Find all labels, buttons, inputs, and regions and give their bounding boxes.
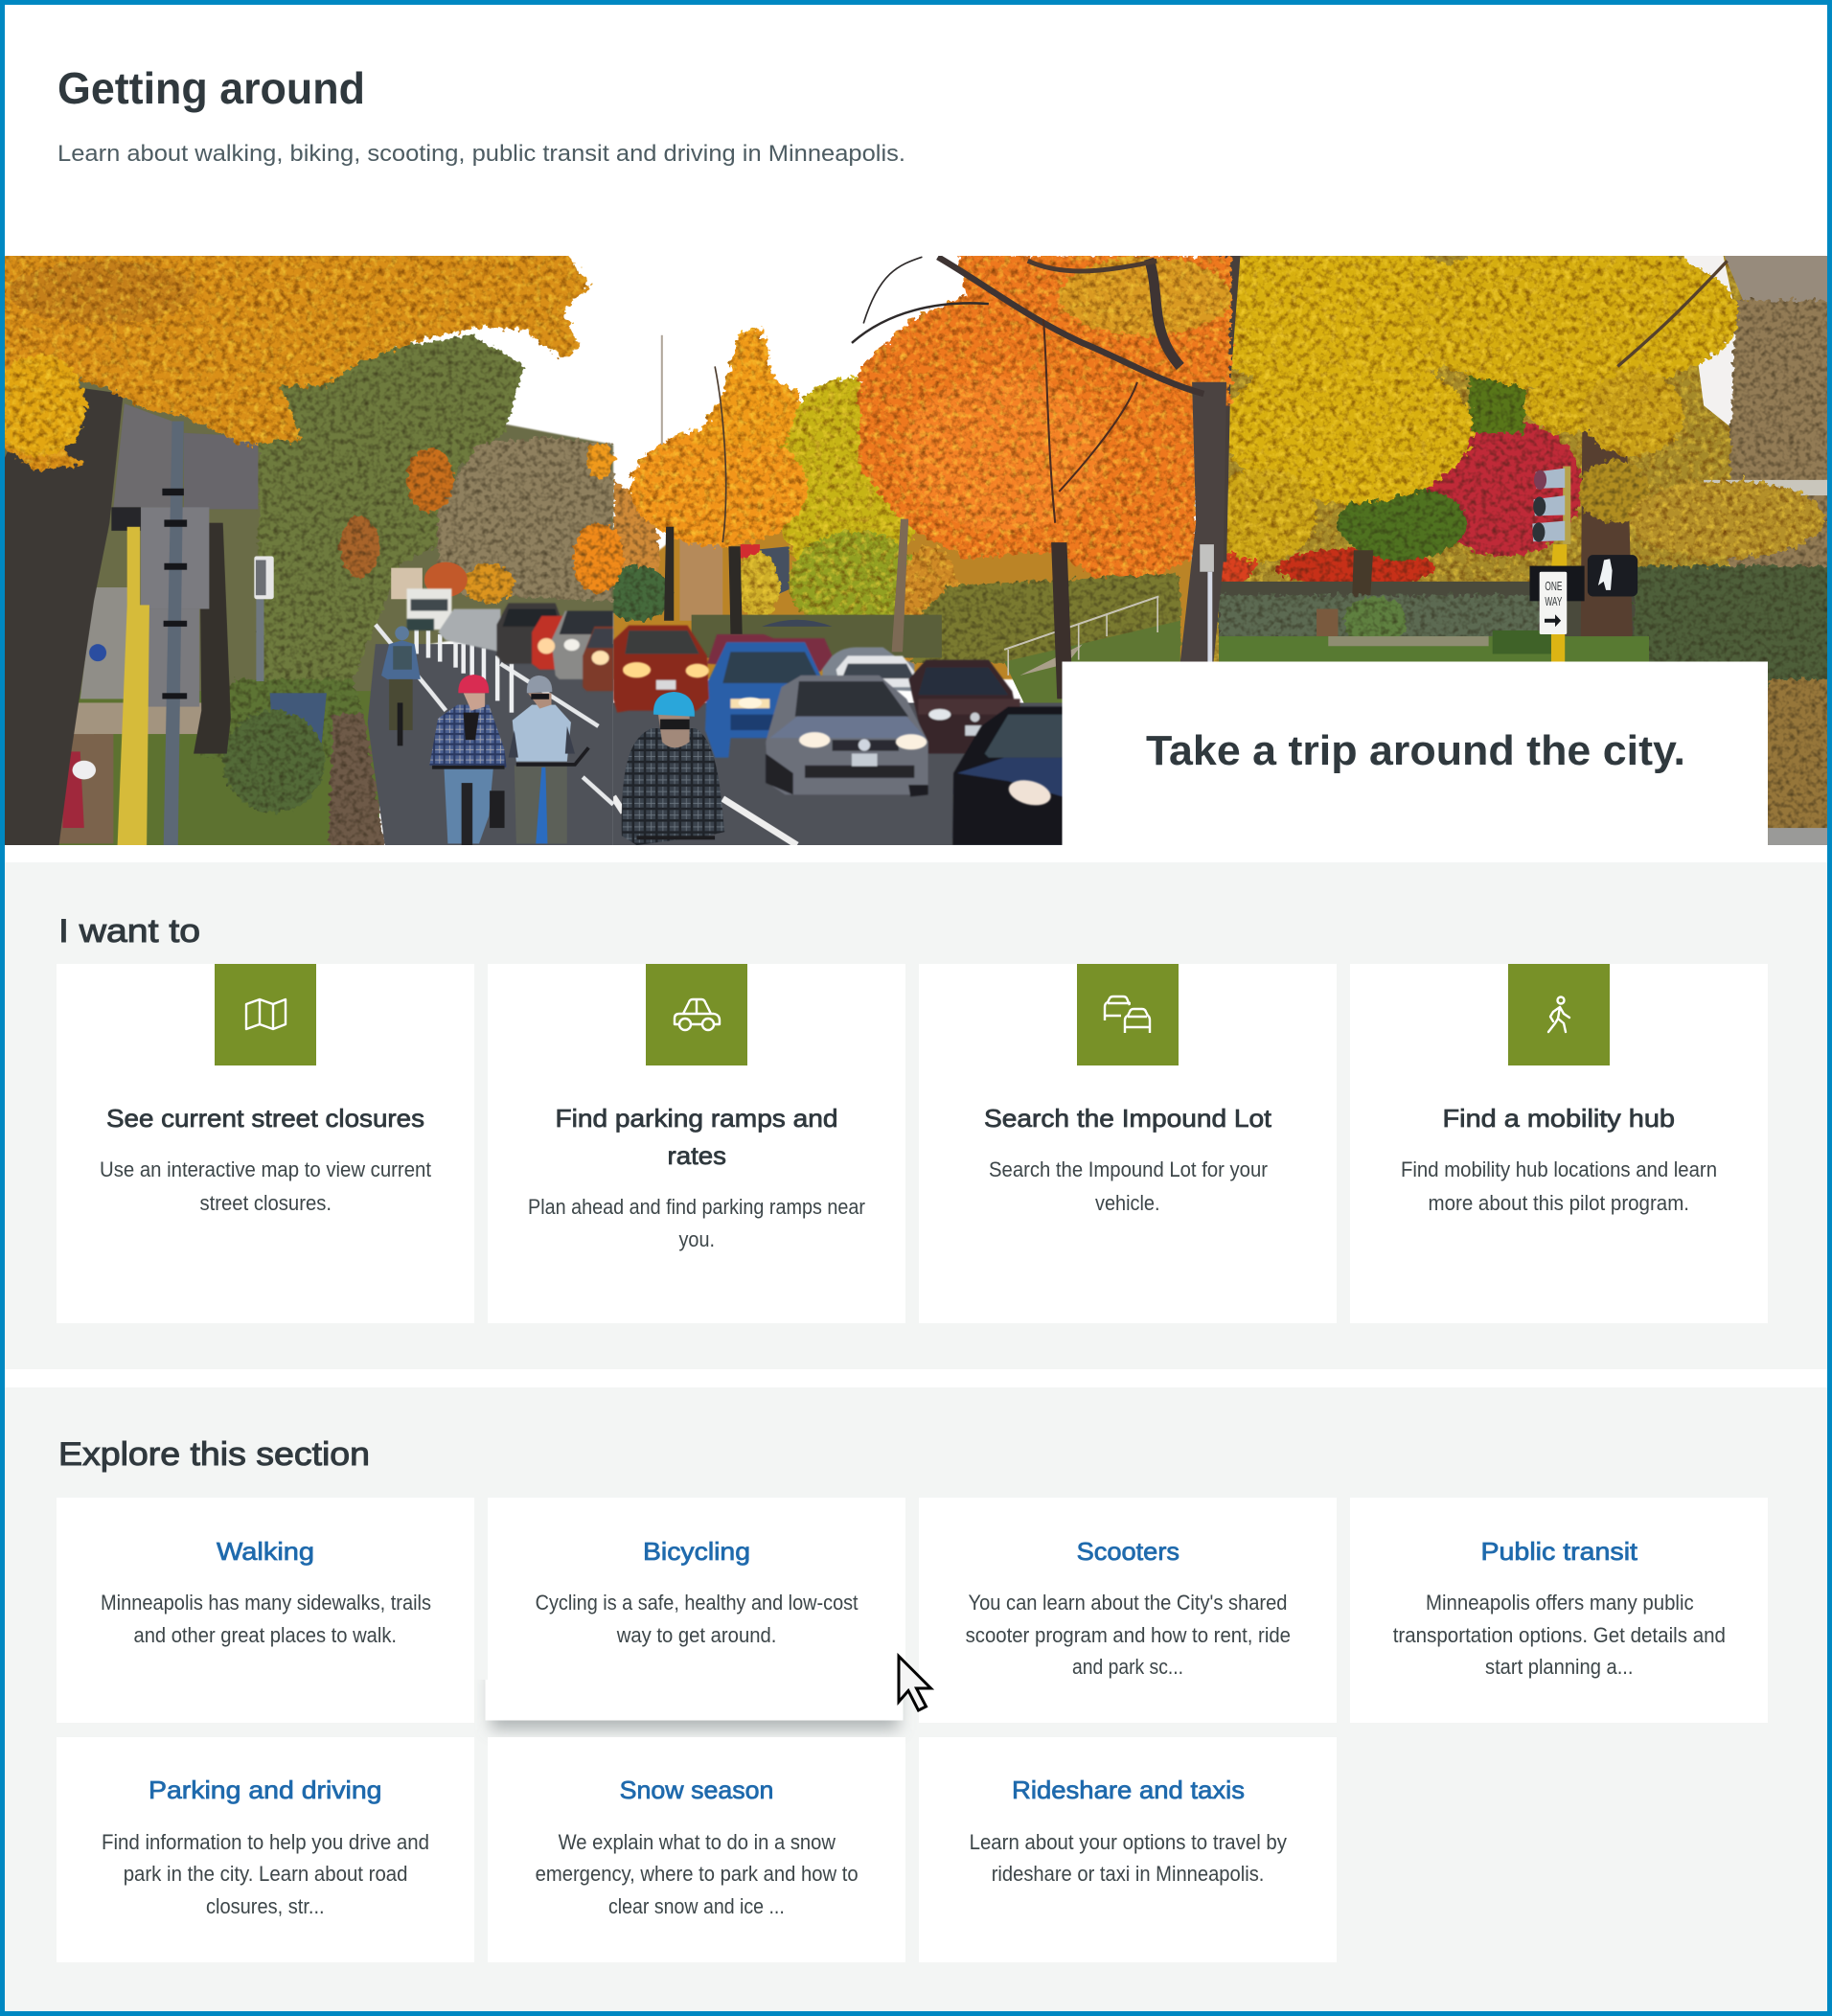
card text: Search the Impound Lot for your: [989, 1157, 1268, 1181]
cyclist with grey helmet: [509, 676, 588, 843]
card: Walking: [57, 1498, 474, 1723]
traffic signal: [1532, 467, 1570, 544]
photo region: left maple tree, street signs and cyclists: [0, 249, 624, 847]
card title: Find a mobility hub: [1443, 1104, 1675, 1133]
card link title: Public transit: [1481, 1537, 1638, 1566]
card: Snow season: [488, 1737, 905, 1962]
card text: clear snow and ice ...: [608, 1894, 785, 1918]
card: Find parking ramps and rates: [488, 964, 905, 1323]
callout: Take a trip around the city: [1062, 661, 1768, 845]
hero photo: autumn street with cyclists and cars: [0, 241, 1832, 847]
page title: Getting around: [57, 63, 365, 113]
card text: [101, 1591, 431, 1647]
card text: scooter program and how to rent, ride: [966, 1623, 1291, 1647]
photo region: right side yellow trees and signals: [1187, 241, 1832, 847]
one way sign: ONE: [1545, 579, 1563, 593]
icon: pedestrian: [1508, 964, 1610, 1065]
card text: We explain what to do in a snow: [559, 1830, 836, 1854]
card text: street closures.: [199, 1191, 332, 1215]
card text: [102, 1830, 429, 1918]
yellow signal pole: [1551, 544, 1567, 662]
card text: you.: [678, 1227, 715, 1251]
card text: [989, 1157, 1268, 1215]
car headlights: [623, 662, 1053, 810]
cyclist with blue helmet: [622, 692, 724, 845]
card link title: Bicycling: [643, 1537, 750, 1566]
yellow sign post: [117, 527, 149, 847]
heading: Explore this section: Explore this section: [58, 1436, 370, 1473]
narrow tree behind signs: [194, 523, 231, 754]
hover shadow: [491, 1672, 899, 1730]
card text: more about this pilot program.: [1428, 1191, 1689, 1215]
card link title: Snow season: [620, 1775, 773, 1804]
photo region: center orange trees and car traffic: [602, 255, 1231, 845]
card link title: Scooters: [1077, 1537, 1179, 1566]
bike lane stripe: [613, 796, 797, 845]
panel: Explore this section: [5, 1387, 1827, 2011]
card text: [536, 1830, 859, 1918]
card text: [536, 1591, 859, 1647]
card title: Find parking ramps and: [556, 1104, 837, 1133]
card text: Use an interactive map to view current: [100, 1157, 431, 1181]
card text: emergency, where to park and how to: [536, 1862, 859, 1886]
page subtitle: Learn about walking, biking, scooting, public transit and driving in Minneapolis.: [57, 141, 905, 167]
card text: [100, 1157, 431, 1215]
card text: transportation options. Get details and: [1393, 1623, 1726, 1647]
icon: folded map: [215, 964, 316, 1065]
card: Rideshare and taxis: [919, 1737, 1337, 1962]
card text: Find information to help you drive and: [102, 1830, 429, 1854]
card title: Search the Impound Lot: [984, 1104, 1272, 1133]
card text: start planning a...: [1485, 1655, 1633, 1679]
card text: Find mobility hub locations and learn: [1401, 1157, 1717, 1181]
grey sign pole with clips: [162, 422, 187, 847]
card text: [966, 1591, 1291, 1679]
card: Search the Impound Lot: [919, 964, 1337, 1323]
card title: See current street closures: [106, 1104, 424, 1133]
small sign on post: [254, 556, 274, 681]
card text: vehicle.: [1095, 1191, 1159, 1215]
one way sign: WAY: [1545, 594, 1563, 608]
card: Bicycling (hover state with shadow): [485, 1498, 905, 1730]
card: Public transit: [1350, 1498, 1768, 1723]
large maple trunk: [0, 382, 124, 847]
utility box with blue disc: [80, 587, 129, 699]
distant traffic: [406, 588, 613, 691]
icon: mouse cursor arrow: [899, 1656, 931, 1710]
heading: I want to: I want to: [58, 913, 200, 950]
card text: rideshare or taxi in Minneapolis.: [992, 1862, 1264, 1886]
lane bollards: [417, 629, 512, 713]
card text: park in the city. Learn about road: [124, 1862, 407, 1886]
card text: [1393, 1591, 1726, 1679]
tree trunks and branches: [661, 257, 1226, 699]
card text: and park sc...: [1072, 1655, 1183, 1679]
card text: and other great places to walk.: [134, 1623, 397, 1647]
cyclist with red helmet: [429, 675, 507, 845]
card text: Minneapolis offers many public: [1426, 1591, 1694, 1615]
card text: [1401, 1157, 1717, 1215]
card text: [970, 1830, 1287, 1886]
card link title: Parking and driving: [149, 1775, 381, 1804]
card text: Minneapolis has many sidewalks, trails: [101, 1591, 431, 1615]
card: See current street closures: [57, 964, 474, 1323]
card: Find a mobility hub: [1350, 964, 1768, 1323]
back cyclist: [381, 626, 421, 745]
street sign backs: [111, 403, 258, 707]
pedestrian signal: [1588, 555, 1637, 596]
card link title: Walking: [217, 1537, 314, 1566]
bike lane and street surface: [368, 644, 613, 847]
fire hydrant: [62, 751, 96, 828]
card text: You can learn about the City's shared: [968, 1591, 1288, 1615]
maple foliage: [0, 249, 590, 470]
icon: car: [646, 964, 747, 1065]
card text: Plan ahead and find parking ramps near: [528, 1195, 865, 1219]
callout: Take a trip around the city: Take a trip around the city.: [1146, 727, 1685, 774]
ground: lawn, leaf litter and bush: [55, 679, 385, 847]
card: Parking and driving: [57, 1737, 474, 1962]
hover card lower edge: [485, 1680, 903, 1721]
one way sign: [1540, 572, 1567, 634]
card title: rates: [667, 1141, 726, 1170]
card text: [528, 1195, 865, 1251]
card text: Cycling is a safe, healthy and low-cost: [536, 1591, 859, 1615]
card text: Learn about your options to travel by: [970, 1830, 1287, 1854]
card link title: Rideshare and taxis: [1012, 1775, 1245, 1804]
card title: [556, 1104, 837, 1170]
cars in traffic: [613, 626, 1066, 845]
card text: closures, str...: [206, 1894, 325, 1918]
card: Scooters: [919, 1498, 1337, 1723]
road: [613, 702, 1063, 845]
card text: way to get around.: [616, 1623, 776, 1647]
icon: two cars: [1077, 964, 1179, 1065]
panel: I want to: [5, 862, 1827, 1369]
